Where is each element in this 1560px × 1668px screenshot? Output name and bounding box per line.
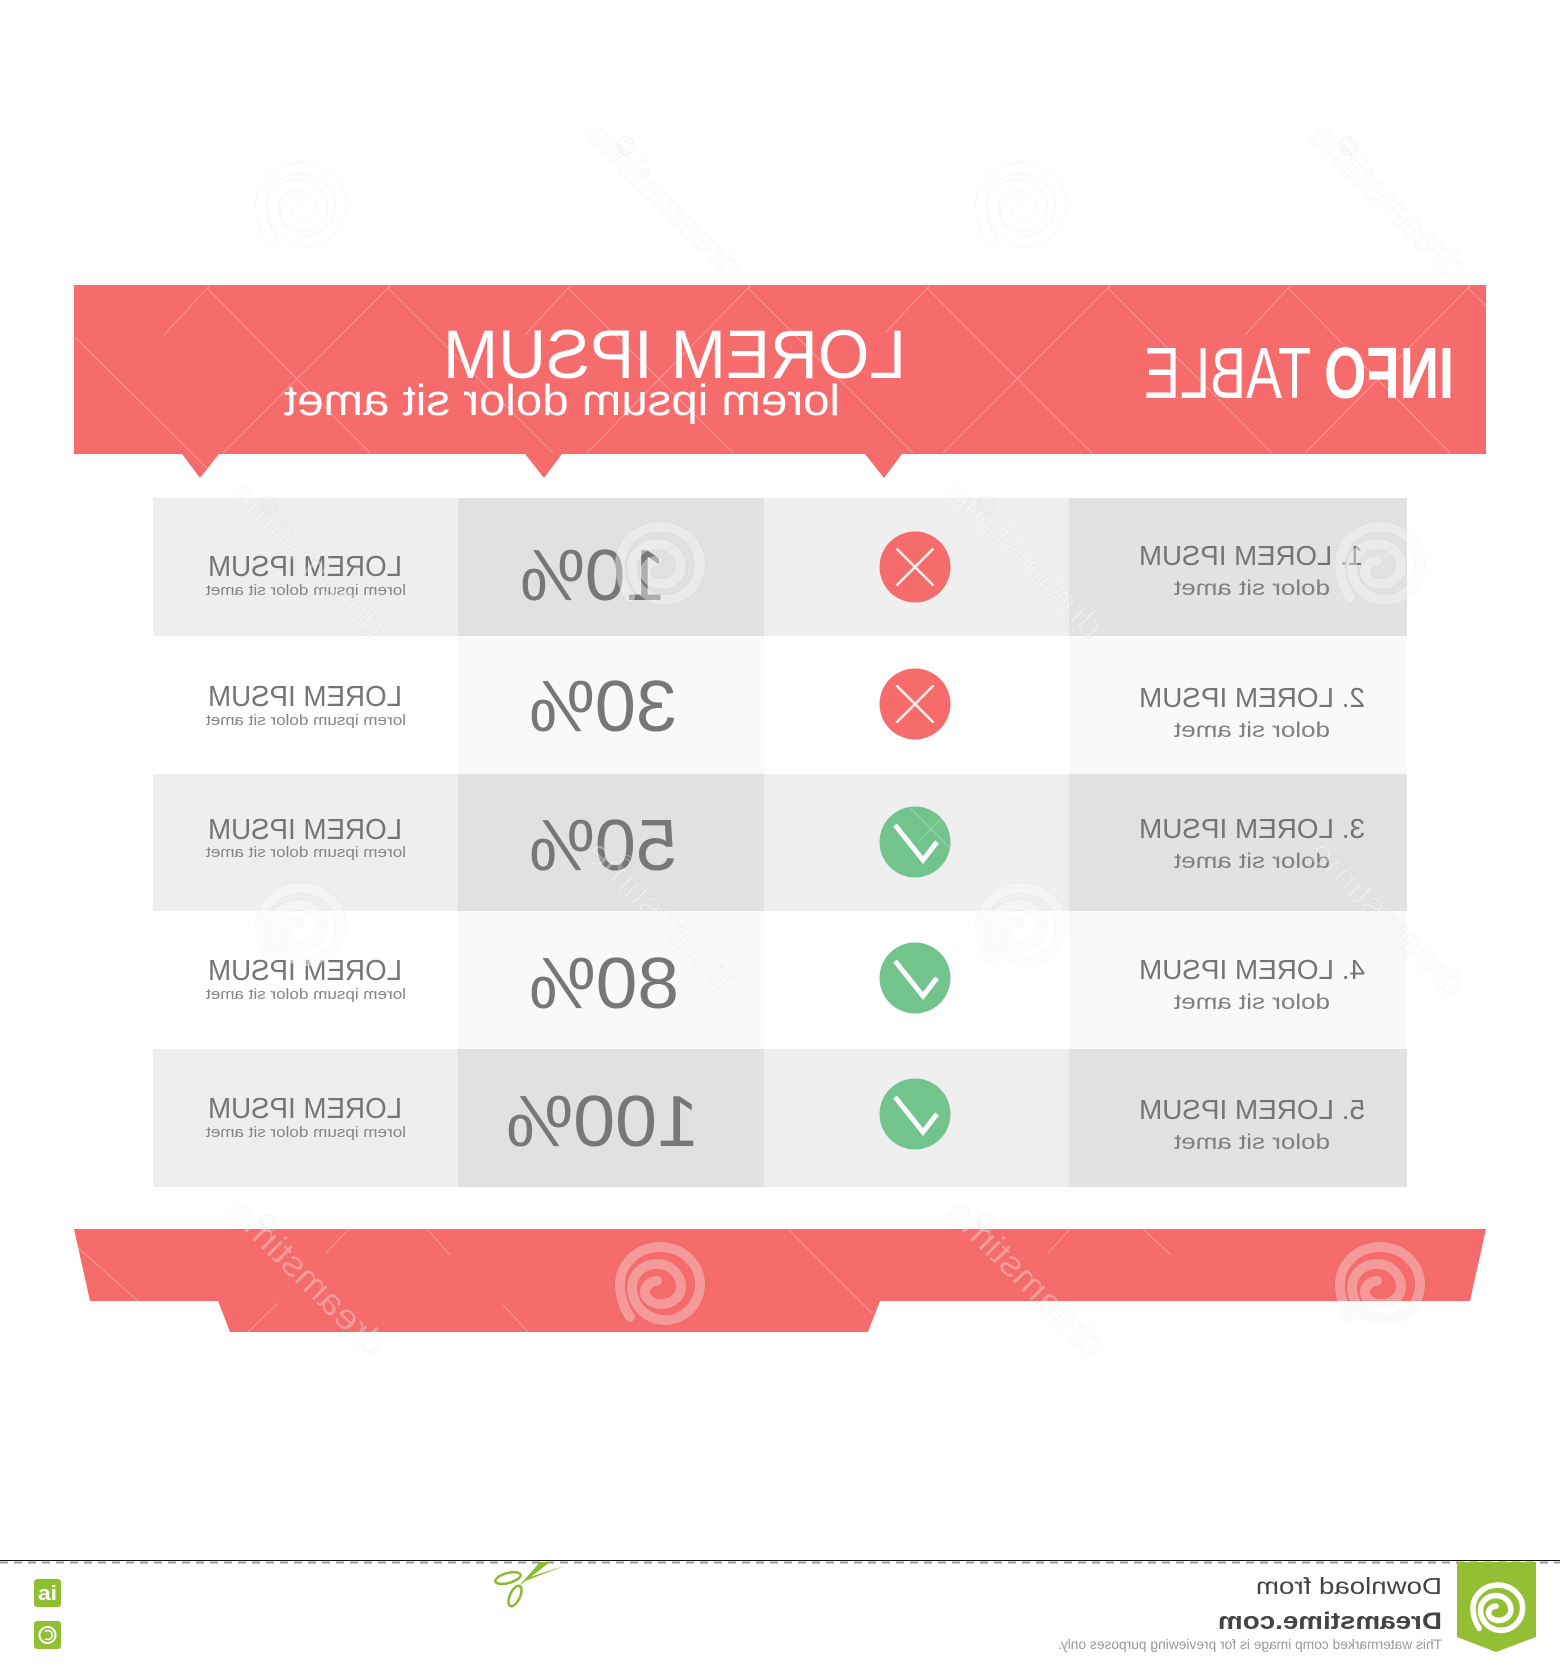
column: descriptions: lorem ipsum dolor sit amet [205, 844, 406, 861]
logo title: INFO TABLE: INFO [1324, 334, 1454, 414]
watermark: diagonal dreamstime text: dreamstime [221, 1190, 395, 1364]
watermark: diagonal dreamstime text: dreamstime [578, 831, 752, 1005]
cut line: black rule and grey dashes [0, 1560, 1560, 1562]
subheading: lorem ipsum dolor sit amet: lorem ipsum dolor sit amet [284, 376, 840, 425]
column: numbered items: 5. LOREM IPSUM [1139, 1094, 1365, 1125]
logo title: INFO TABLE: TABLE [1144, 334, 1311, 414]
column: percentages: 10% [520, 536, 666, 616]
column: numbered items: 4. LOREM IPSUM [1139, 954, 1365, 985]
icon: green check, row 3 [880, 806, 952, 878]
icon: green check, row 4 [880, 942, 950, 1014]
column: percentages: 30% [529, 667, 677, 747]
panel: footer ribbon [74, 1229, 1486, 1332]
column: numbered items: 3. LOREM IPSUM [1139, 813, 1365, 844]
column: descriptions: lorem ipsum dolor sit amet [205, 986, 406, 1003]
watermark: diagonal dreamstime text: dreamstime [1301, 831, 1475, 1005]
watermark: diagonal dreamstime text: dreamstime [578, 113, 752, 287]
watermark: diagonal dreamstime text: dreamstime [221, 472, 395, 646]
watermark: diagonal dreamstime text: dreamstime [1301, 113, 1475, 287]
watermark: diagonal dreamstime text: © [969, 487, 1004, 522]
column: numbered items: 2. LOREM IPSUM [1139, 682, 1365, 713]
watermark: diagonal dreamstime text: © [251, 487, 286, 522]
watermark: diagonal dreamstime text: © [251, 1205, 286, 1240]
text: download from dreamstime credit: Download from [1256, 1573, 1442, 1599]
column: numbered items [1139, 540, 1365, 1154]
watermark: diagonal dreamstime text: © [608, 128, 643, 163]
icon: ai file badge [34, 1579, 61, 1607]
column: descriptions: lorem ipsum dolor sit amet [205, 1124, 406, 1141]
icon: red cross, row 1 [880, 532, 950, 602]
watermark: diagonal dreamstime text: dreamstime [939, 472, 1113, 646]
icon: green check, row 5 [880, 1078, 950, 1150]
column: percentages: 100% [506, 1082, 699, 1162]
logo title: INFO TABLE [1144, 334, 1454, 414]
column: percentages: 50% [529, 806, 677, 886]
column: numbered items: dolor sit amet [1174, 577, 1330, 600]
column: numbered items: 1. LOREM IPSUM [1139, 540, 1363, 571]
heading: LOREM IPSUM: LOREM IPSUM [443, 316, 906, 393]
column: numbered items: dolor sit amet [1174, 719, 1330, 742]
column: descriptions: LOREM IPSUM [208, 955, 402, 987]
table: five-row grid backgrounds [153, 498, 1407, 1187]
text: download from dreamstime credit [1058, 1573, 1442, 1652]
watermark: diagonal dreamstime text: © [1331, 846, 1366, 881]
icon: ai file badge: ai [38, 1583, 57, 1605]
column: descriptions: LOREM IPSUM [208, 814, 402, 846]
column: descriptions: LOREM IPSUM [208, 551, 402, 583]
column: percentages [506, 536, 699, 1162]
watermark: diagonal dreamstime text: dreamstime [939, 1190, 1113, 1364]
text: download from dreamstime credit: Dreamstime.com [1218, 1608, 1442, 1635]
column: descriptions: LOREM IPSUM [208, 1093, 402, 1125]
watermark: spirals [261, 168, 1420, 1320]
column: percentages: 80% [529, 944, 679, 1024]
column: descriptions: lorem ipsum dolor sit amet [205, 582, 406, 599]
watermark: diagonal dreamstime text [221, 113, 1475, 1364]
watermark: diagonal dreamstime text: © [1331, 128, 1366, 163]
column: numbered items: dolor sit amet [1174, 850, 1330, 873]
watermark: diagonal dreamstime text: © [608, 846, 643, 881]
watermark: diagonal dreamstime text: © [969, 1205, 1004, 1240]
icon: green scissors [494, 1562, 567, 1608]
icon: red cross, row 2 [880, 668, 950, 740]
column: descriptions [205, 551, 406, 1141]
icon: copyright badge [34, 1621, 61, 1649]
column: numbered items: dolor sit amet [1174, 991, 1330, 1014]
panel: header ribbon with three pointers [72, 283, 1488, 478]
column: descriptions: lorem ipsum dolor sit amet [205, 712, 406, 729]
column: descriptions: LOREM IPSUM [208, 681, 402, 713]
column: numbered items: dolor sit amet [1174, 1131, 1330, 1154]
icon: dreamstime badge [1457, 1562, 1536, 1652]
text: download from dreamstime credit: This watermarked comp image is for previewing purposes only. [1058, 1637, 1442, 1652]
